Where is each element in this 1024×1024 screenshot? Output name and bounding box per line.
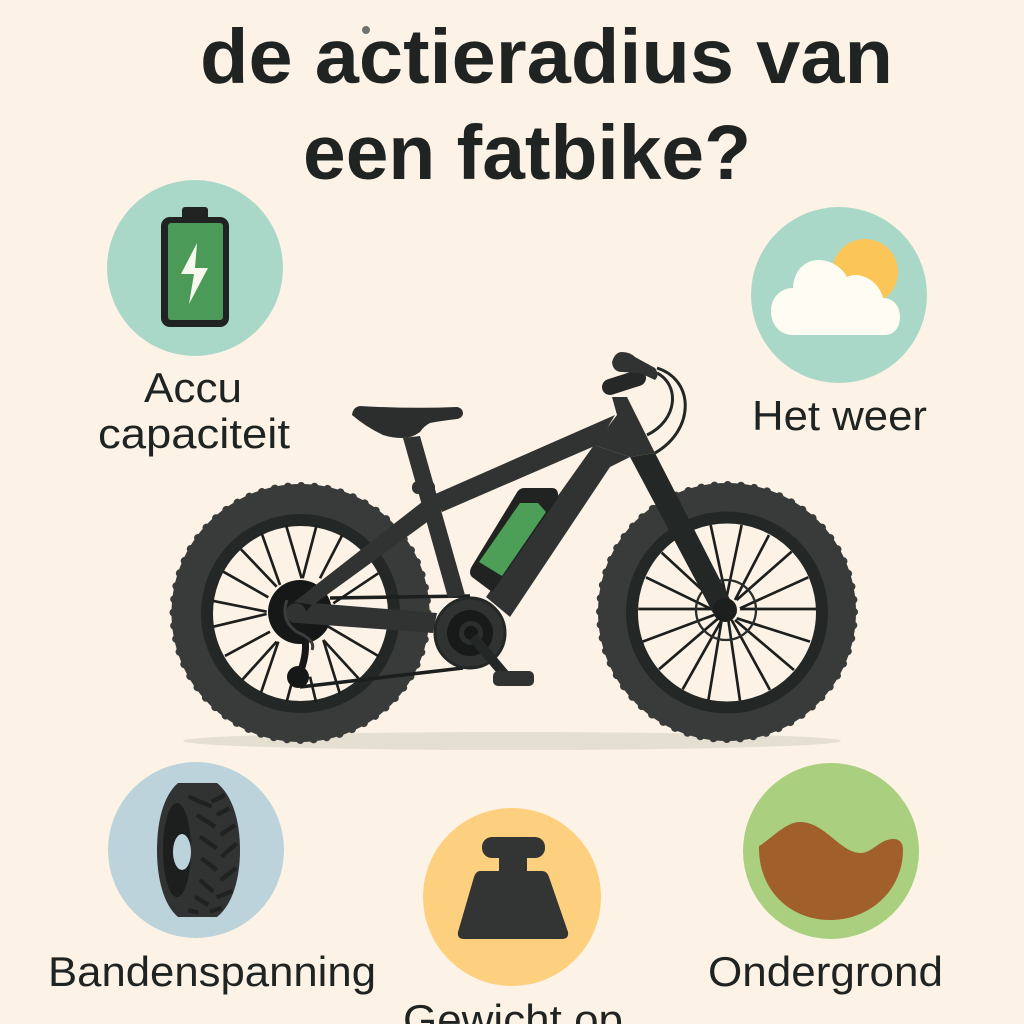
icon: sun and cloud — [771, 239, 900, 335]
label: bandenspanning: Bandenspanning — [48, 948, 376, 995]
factor: ground surface — [708, 763, 943, 995]
icon: soil mound — [759, 822, 903, 920]
label: accu capaciteit: Accu — [144, 364, 242, 411]
handlebar and cables — [610, 352, 685, 453]
ground shadow — [183, 732, 841, 750]
fork — [630, 453, 737, 613]
factor: rider weight — [403, 808, 623, 1024]
label: accu capaciteit: capaciteit — [98, 410, 290, 457]
factor: tyre pressure — [48, 762, 376, 995]
frame — [286, 397, 655, 633]
icon: battery — [161, 207, 229, 327]
label: accu capaciteit — [98, 364, 290, 457]
front wheel — [598, 483, 856, 741]
label: het weer: Het weer — [752, 392, 927, 439]
rear wheel — [172, 484, 430, 742]
icon: weight — [458, 837, 568, 939]
illustration: fatbike — [172, 352, 856, 742]
title: de actieradius van — [200, 14, 893, 100]
icon: tyre — [157, 783, 240, 917]
seat — [352, 406, 463, 438]
factor: weather — [751, 207, 927, 439]
factor: battery capacity — [98, 180, 290, 457]
label: ondergrond: Ondergrond — [708, 948, 943, 995]
battery pack — [470, 488, 558, 592]
drivetrain — [285, 598, 534, 688]
chain — [300, 596, 470, 687]
title: een fatbike? — [303, 110, 751, 196]
title — [200, 14, 893, 196]
